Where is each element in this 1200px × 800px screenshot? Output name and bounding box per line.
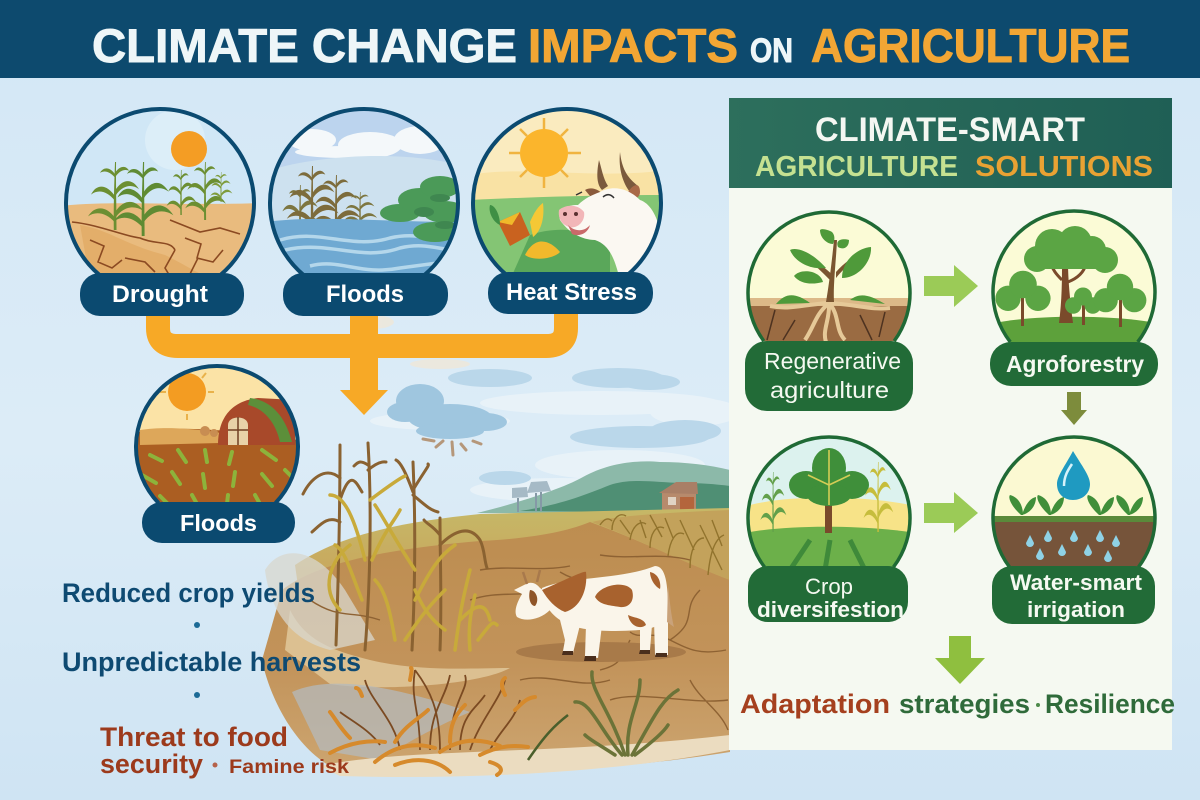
label: diversifestion (757, 597, 904, 622)
dark rain cloud (387, 384, 507, 455)
text: Famine risk: Famine risk (229, 757, 349, 778)
label: Floods (142, 502, 295, 543)
solution: Agroforestry (990, 208, 1160, 386)
label (748, 566, 908, 622)
field and barn scene (138, 368, 296, 502)
label: Floods: Floods (180, 510, 257, 536)
brown upper stalks (303, 443, 487, 650)
title: ON (750, 32, 793, 70)
solution: Water-smart irrigation (990, 435, 1160, 624)
dead corn field, far right (592, 510, 730, 580)
flow arrow: impacts merge and point down (158, 312, 566, 415)
text: Threat to food security: security (100, 749, 203, 779)
label (745, 341, 913, 411)
sun with rays (509, 118, 581, 188)
outcomes line: Adaptation (740, 689, 890, 719)
icon card: Heat Stress (470, 105, 665, 314)
panel: climate-smart solutions (729, 98, 1175, 750)
label: Water-smart (1010, 570, 1143, 595)
withered corn stalks (303, 443, 497, 650)
dusty riverbank rim (265, 553, 730, 777)
small trees (995, 271, 1146, 327)
sprout on cracked soil (750, 214, 908, 341)
icon card: Floods (265, 105, 467, 316)
grazing cow (514, 566, 686, 662)
title: AGRICULTURE (811, 19, 1130, 72)
circle outline (66, 109, 254, 275)
water drop (1057, 451, 1090, 500)
label: Crop (805, 574, 853, 599)
icon card: Floods (crop field) (130, 360, 305, 543)
crop rows (142, 450, 293, 504)
circle outline (473, 109, 661, 275)
panel header (729, 98, 1172, 188)
panel header: CLIMATE-SMART (815, 111, 1085, 149)
yellow lower leaves (329, 476, 497, 650)
field strip (295, 508, 730, 600)
icon card: Drought (60, 105, 260, 316)
outcomes line: strategies (899, 689, 1030, 719)
circle outline (993, 211, 1155, 342)
label: Drought (80, 273, 244, 316)
outcomes line: Resilience (1045, 689, 1175, 719)
seedlings (1009, 495, 1143, 515)
solution: Regenerative agriculture (745, 210, 915, 411)
bullet (194, 622, 200, 628)
circle outline (748, 212, 910, 341)
text: Threat to food security (100, 722, 288, 779)
text: Reduced crop yields: Reduced crop yields (62, 578, 315, 608)
label: irrigation (1027, 597, 1125, 622)
flood scene (272, 111, 456, 273)
label (992, 566, 1155, 624)
arrow: diversification to irrigation (924, 492, 978, 533)
panel header: AGRICULTURE (755, 151, 958, 183)
bullet (212, 762, 218, 768)
impact list (62, 578, 361, 779)
title bar (0, 0, 1200, 78)
label (990, 342, 1158, 386)
arrow: regenerative to agroforestry (924, 265, 978, 307)
label: Drought: Drought (112, 281, 208, 308)
title: IMPACTS (528, 19, 738, 72)
bullet (194, 692, 200, 698)
dry orange shrub (330, 668, 535, 775)
happy cow (558, 152, 658, 272)
text: Threat to food security: Threat to food (100, 722, 288, 752)
large tree (1024, 226, 1118, 323)
heat scene with cow (475, 111, 659, 272)
label: Heat Stress: Heat Stress (506, 279, 637, 306)
text: Unpredictable harvests: Unpredictable harvests (62, 647, 361, 677)
drought scene (68, 131, 252, 273)
droplet and soil scene (994, 438, 1154, 566)
circle outline (136, 366, 298, 503)
farmhouse (659, 482, 698, 513)
label: Heat Stress (488, 272, 653, 314)
water droplets in soil (1026, 530, 1120, 562)
circle outline (270, 109, 458, 275)
green-brown grass tuft (528, 672, 678, 760)
circle outline (993, 437, 1155, 567)
corn and vegetables (490, 203, 560, 259)
title: CLIMATE CHANGE (92, 19, 517, 72)
label: Floods: Floods (326, 281, 404, 308)
cracked ground (262, 522, 730, 776)
label: Regenerative (764, 348, 901, 374)
panel header: SOLUTIONS (975, 151, 1153, 183)
arrow: down to outcomes (935, 636, 985, 684)
barn (200, 398, 295, 445)
illustration: drought-stricken farm landscape (262, 315, 740, 777)
label: Floods (283, 273, 448, 316)
distant sheds (512, 481, 551, 512)
arrow: agroforestry to irrigation (1061, 392, 1087, 425)
outcomes line (740, 689, 1175, 719)
label: Agroforestry (1006, 351, 1144, 377)
solution: Crop diversification (745, 435, 915, 622)
trees scene (994, 212, 1154, 342)
distant hills (477, 461, 730, 513)
sky clouds (350, 315, 740, 502)
circle outline (748, 437, 910, 567)
mixed crops scene (750, 438, 908, 567)
ground cracks (310, 555, 728, 730)
label: agriculture (770, 377, 889, 403)
